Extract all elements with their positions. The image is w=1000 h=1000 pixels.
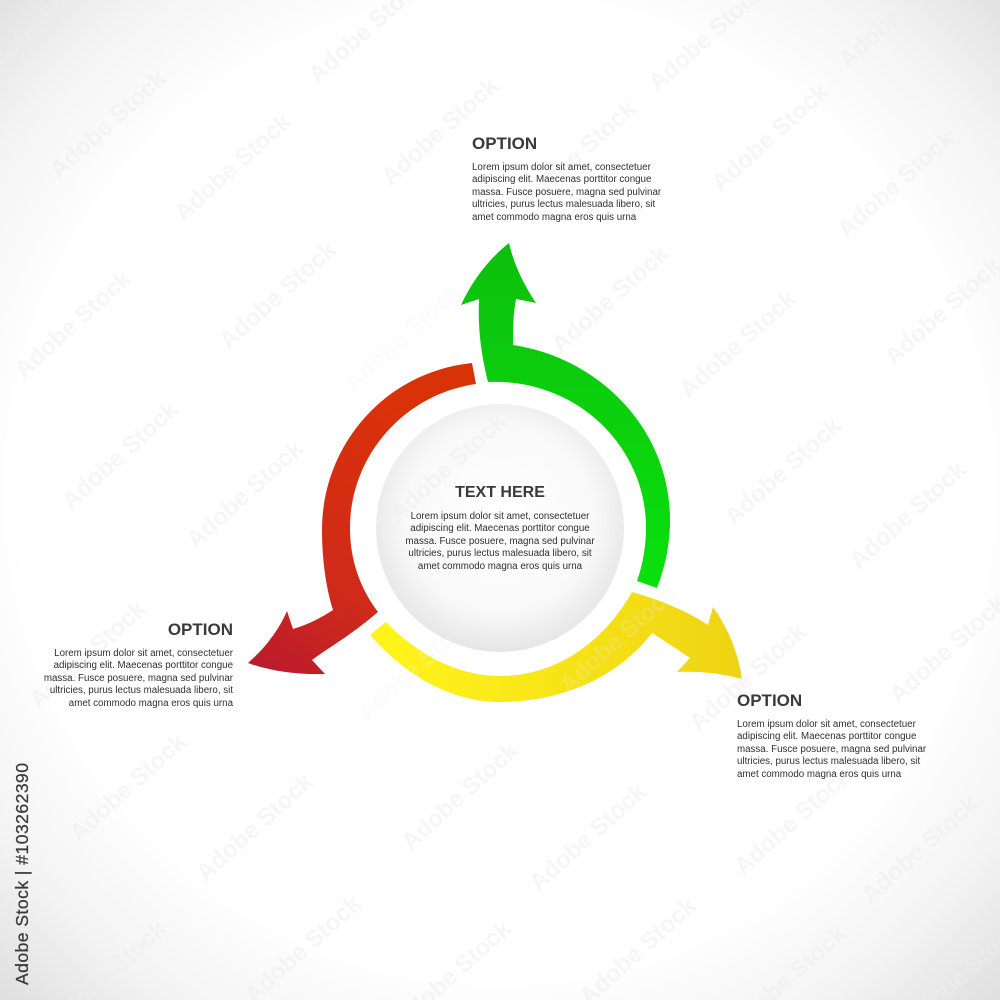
- text block: centre: [405, 484, 595, 572]
- text block: top option: adipiscing elit. Maecenas porttitor congue: [472, 174, 651, 185]
- stock id label: Adobe Stock | #103262390: [12, 763, 32, 985]
- text block: right option: ultricies, purus lectus malesuada libero, sit: [737, 756, 920, 767]
- text block: top option: massa. Fusce posuere, magna sed pulvinar: [472, 187, 661, 198]
- watermark: Adobe Stock: [44, 65, 172, 184]
- watermark: Adobe Stock: [514, 95, 642, 214]
- watermark: Adobe Stock: [719, 412, 847, 531]
- text block: top option: amet commodo magna eros quis urna: [472, 212, 636, 223]
- watermark: Adobe Stock: [384, 408, 512, 527]
- watermark: Adobe Stock: [729, 762, 857, 881]
- watermark: Adobe Stock: [352, 608, 480, 727]
- watermark: Adobe Stock: [24, 595, 152, 714]
- text block: centre: adipiscing elit. Maecenas porttitor congue: [410, 523, 590, 534]
- text block: centre: amet commodo magna eros quis urna: [418, 561, 582, 572]
- watermark: Adobe Stock: [9, 265, 137, 384]
- text block: right option: massa. Fusce posuere, magna sed pulvinar: [737, 744, 926, 755]
- text block: right option: [737, 691, 926, 780]
- watermark: Adobe Stock: [169, 108, 297, 227]
- text block: right option: Lorem ipsum dolor sit amet, consectetuer: [737, 719, 916, 730]
- text block: top option: OPTION: [472, 134, 537, 153]
- text block: left option: Lorem ipsum dolor sit amet, consectetuer: [54, 648, 233, 659]
- text block: left option: adipiscing elit. Maecenas porttitor congue: [54, 660, 233, 671]
- watermark: Adobe Stock: [554, 580, 682, 699]
- text block: centre: ultricies, purus lectus malesuada libero, sit: [408, 548, 592, 559]
- watermark: Adobe Stock: [56, 396, 184, 515]
- text block: left option: OPTION: [168, 620, 233, 639]
- text block: left option: ultricies, purus lectus malesuada libero, sit: [50, 685, 233, 696]
- watermark: Adobe Stock: [181, 435, 309, 554]
- watermark: Adobe Stock: [706, 78, 834, 197]
- text block: centre: massa. Fusce posuere, magna sed pulvinar: [405, 536, 595, 547]
- watermark: Adobe Stock: [214, 236, 342, 355]
- watermark: Adobe Stock: [844, 456, 972, 575]
- text block: top option: ultricies, purus lectus malesuada libero, sit: [472, 199, 655, 210]
- watermark: Adobe Stock: [396, 737, 524, 856]
- watermark: Adobe Stock: [524, 778, 652, 897]
- text block: top option: [472, 134, 661, 223]
- watermark: Adobe Stock: [64, 728, 192, 847]
- centre disc: [376, 404, 624, 652]
- watermark: Adobe Stock: [376, 72, 504, 191]
- text block: centre: TEXT HERE: [455, 484, 545, 501]
- green arrow: [461, 243, 670, 588]
- watermark: Adobe Stock: [832, 125, 960, 244]
- text block: right option: OPTION: [737, 691, 802, 710]
- watermark: Adobe Stock: [856, 790, 984, 909]
- text block: right option: amet commodo magna eros quis urna: [737, 769, 901, 780]
- text block: centre: Lorem ipsum dolor sit amet, consectetuer: [411, 511, 589, 522]
- watermark: Adobe Stock: [674, 285, 802, 404]
- text block: right option: adipiscing elit. Maecenas porttitor congue: [737, 731, 916, 742]
- watermark: Adobe Stock: [684, 618, 812, 737]
- text block: left option: massa. Fusce posuere, magna sed pulvinar: [44, 673, 233, 684]
- text block: left option: [44, 620, 234, 709]
- watermark: Adobe Stock: [191, 768, 319, 887]
- yellow arrow: [370, 592, 742, 702]
- watermark: Adobe Stock: [339, 278, 467, 397]
- text block: top option: Lorem ipsum dolor sit amet, consectetuer: [472, 162, 651, 173]
- red arrow: [248, 363, 476, 674]
- watermark: Adobe Stock: [546, 240, 674, 359]
- text block: left option: amet commodo magna eros quis urna: [69, 698, 233, 709]
